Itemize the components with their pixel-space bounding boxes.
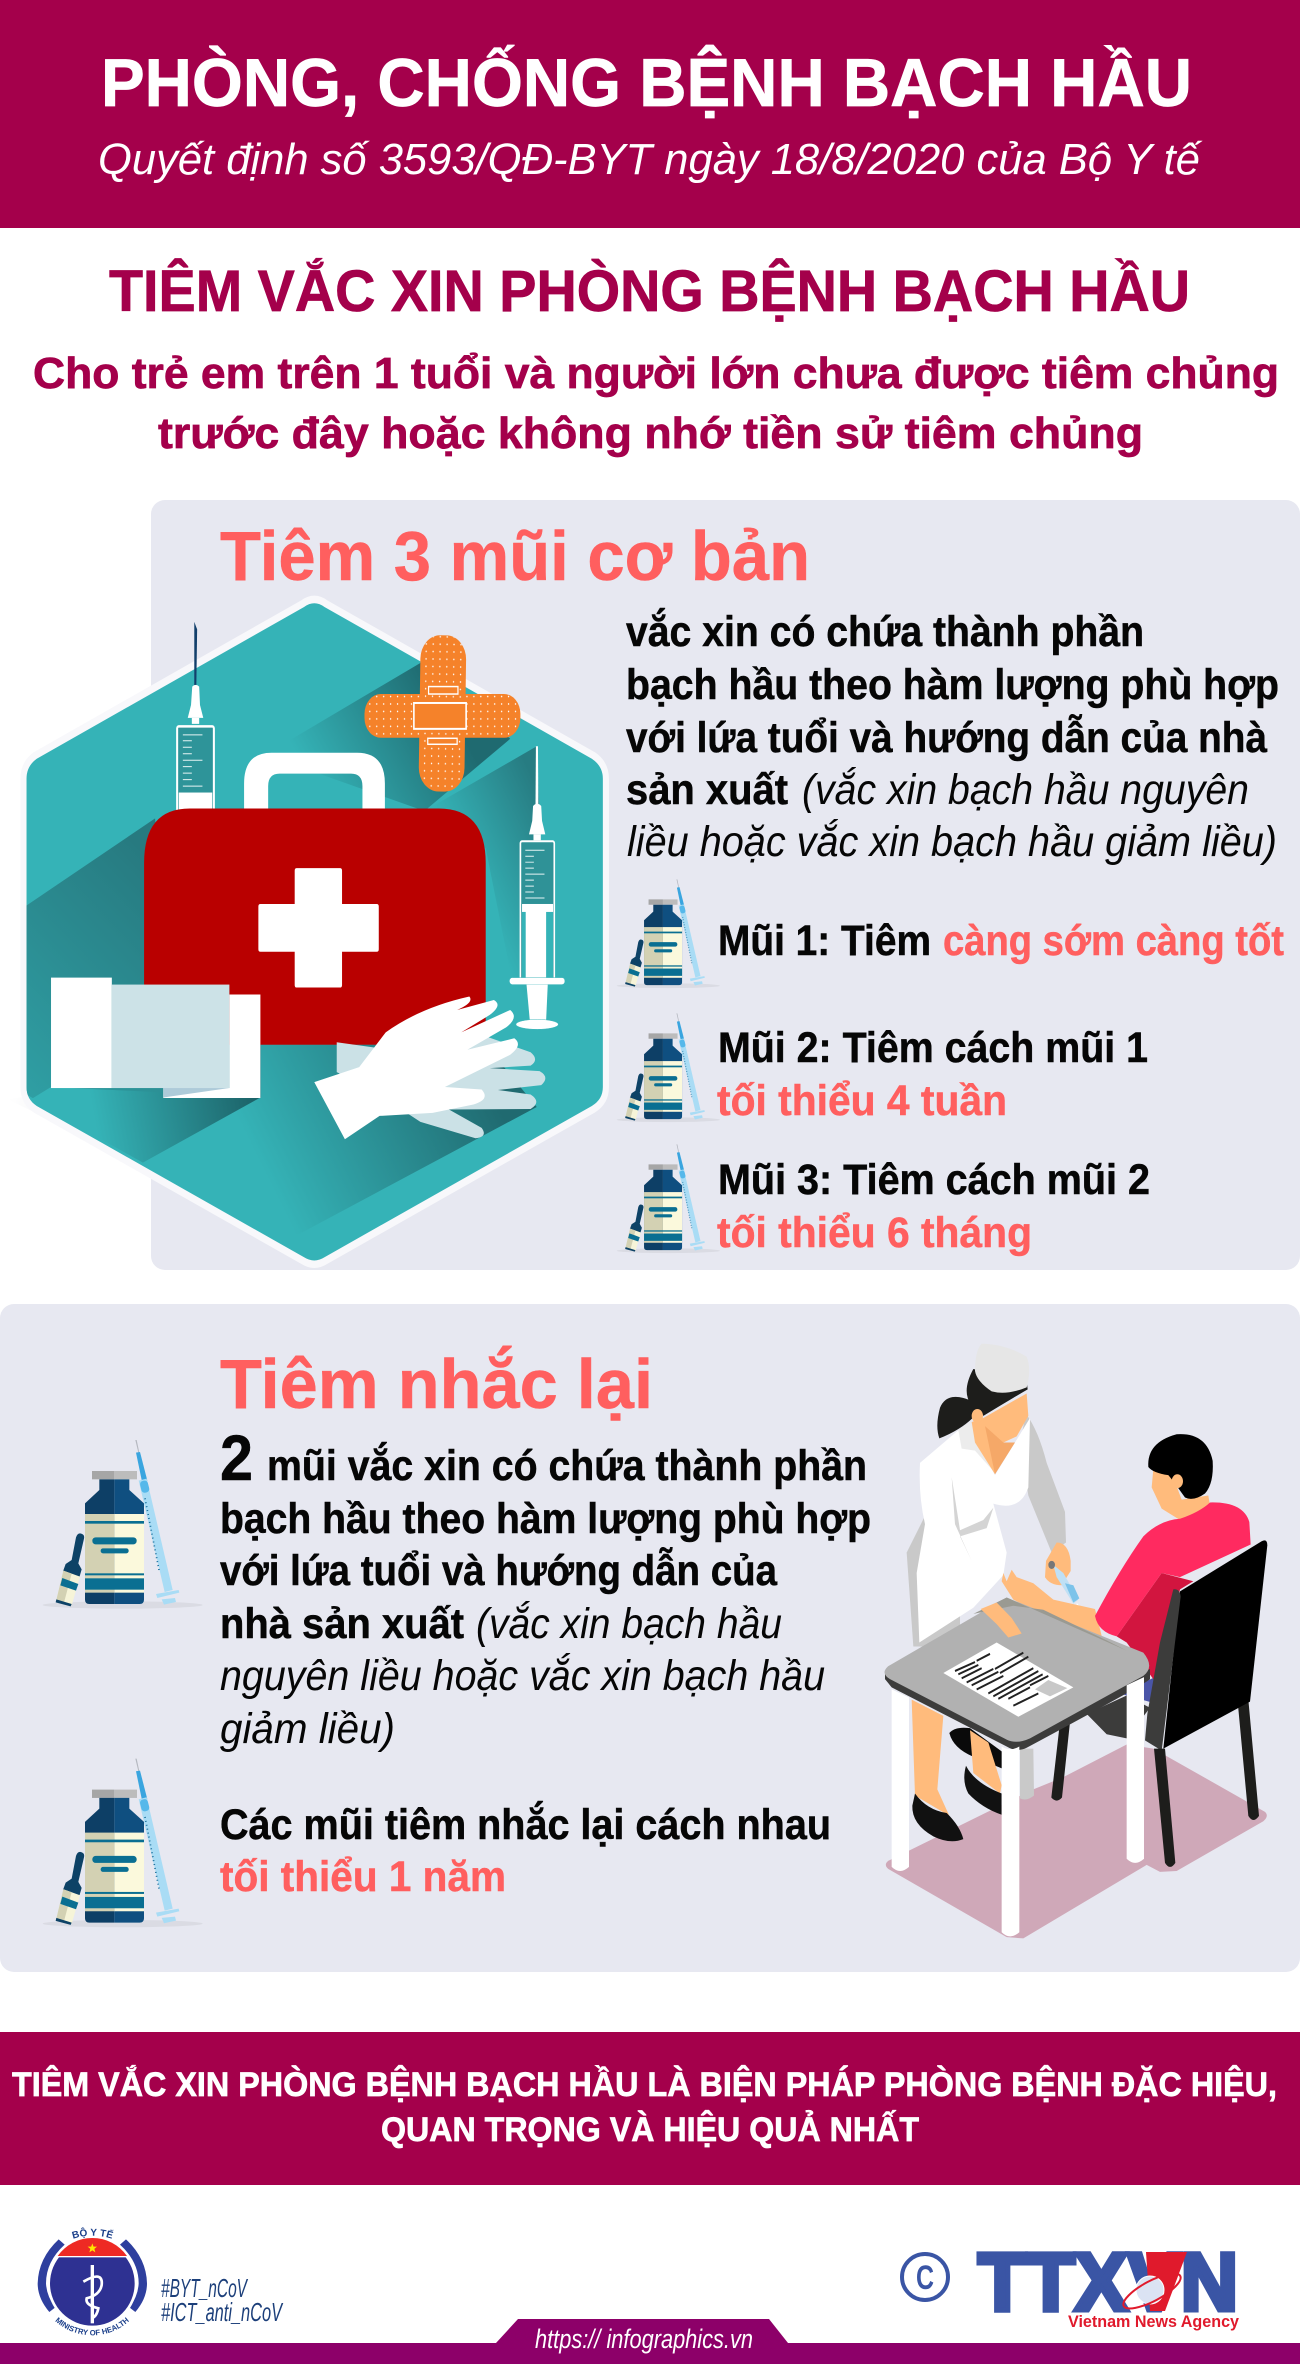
booster interval text: Các mũi tiêm nhắc lại cách nhau xyxy=(220,1800,831,1849)
hashtags: #ICT_anti_nCoV xyxy=(161,2297,284,2327)
booster description text: mũi vắc xin có chứa thành phần xyxy=(267,1441,867,1490)
table xyxy=(885,1598,1150,1936)
agency name: Vietnam News Agency xyxy=(1068,2312,1240,2331)
dose 3 text: Mũi 3: Tiêm cách mũi 2 xyxy=(718,1156,1150,1204)
dose 2 text: Mũi 2: Tiêm cách mũi 1 xyxy=(718,1024,1148,1072)
booster description text: giảm liều) xyxy=(220,1705,395,1753)
dose 1 xyxy=(617,879,1284,988)
dose 1 text: Mũi 1: Tiêm xyxy=(718,917,931,965)
booster description text: với lứa tuổi và hướng dẫn của xyxy=(220,1546,778,1595)
icon: vaccine bottle xyxy=(43,1759,203,1927)
booster interval text: tối thiểu 1 năm xyxy=(220,1853,506,1901)
target group text: Cho trẻ em trên 1 tuổi và người lớn chưa được tiêm chủng xyxy=(33,349,1279,398)
dose 2 xyxy=(617,1013,1148,1125)
icon: vaccine bottle xyxy=(617,879,720,988)
patient xyxy=(1002,1434,1251,1679)
dose 3 text xyxy=(717,1156,1150,1257)
wordmark: TTXVN xyxy=(978,2237,1238,2328)
title: PHÒNG, CHỐNG BỆNH BẠCH HẦU xyxy=(101,44,1192,121)
conclusion text: QUAN TRỌNG VÀ HIỆU QUẢ NHẤT xyxy=(381,2111,919,2149)
description text xyxy=(626,607,1279,866)
booster description text: (vắc xin bạch hầu xyxy=(476,1600,782,1648)
booster description text: nguyên liều hoặc vắc xin bạch hầu xyxy=(220,1652,825,1700)
subtitle: Quyết định số 3593/QĐ-BYT ngày 18/8/2020 của Bộ Y tế xyxy=(98,135,1202,184)
icon: vaccine bottle xyxy=(43,1440,203,1609)
dose 2 text xyxy=(717,1024,1148,1125)
illustration: nurse vaccinating patient xyxy=(885,1344,1267,1938)
panel: booster doses xyxy=(0,1304,1300,1972)
booster description text: bạch hầu theo hàm lượng phù hợp xyxy=(220,1495,871,1543)
icon: case handle xyxy=(244,753,385,813)
nurse xyxy=(907,1344,1086,1841)
icon: right syringe xyxy=(509,746,565,1029)
logo: Ministry of Health: MINISTRY OF HEALTH xyxy=(55,2317,129,2336)
chair back legs xyxy=(1051,1700,1259,1820)
hashtags xyxy=(161,2273,284,2327)
copyright mark: C xyxy=(916,2259,934,2297)
illustration: first aid kit hexagon xyxy=(8,603,603,1260)
document on table xyxy=(943,1642,1073,1717)
description text: sản xuất xyxy=(626,766,788,814)
icon: vaccine bottle xyxy=(617,1013,720,1122)
syringe xyxy=(1048,1561,1086,1615)
booster interval text xyxy=(220,1800,831,1901)
panel: 3 basic doses xyxy=(8,500,1300,1270)
dose 3 xyxy=(617,1144,1150,1257)
booster description text: nhà sản xuất xyxy=(220,1600,464,1648)
dose 3 text: tối thiểu 6 tháng xyxy=(717,1209,1032,1257)
header band xyxy=(0,0,1300,228)
icon: gauze papers xyxy=(51,978,260,1098)
logo: TTXVN xyxy=(902,2237,1240,2331)
patient shoe and pants xyxy=(949,1728,1003,1769)
hashtags: #BYT_nCoV xyxy=(161,2273,249,2303)
website url: https:// infographics.vn xyxy=(535,2324,753,2354)
target group text: trước đây hoặc không nhớ tiền sử tiêm chủng xyxy=(158,409,1143,458)
dose 1 text xyxy=(718,917,1284,965)
icon: gloves xyxy=(314,997,545,1139)
copyright mark xyxy=(902,2254,948,2300)
bottom banner xyxy=(0,2032,1300,2185)
logo: Ministry of Health xyxy=(38,2227,147,2336)
logo: Ministry of Health: BỘ Y TẾ xyxy=(72,2227,114,2239)
section heading: TIÊM VẮC XIN PHÒNG BỆNH BẠCH HẦU xyxy=(109,259,1190,324)
description text: (vắc xin bạch hầu nguyên xyxy=(802,766,1249,814)
booster description text xyxy=(220,1422,871,1753)
icon: left syringe xyxy=(177,622,214,811)
dose 2 text: tối thiểu 4 tuần xyxy=(717,1077,1007,1125)
chair xyxy=(1145,1540,1267,1867)
target group text xyxy=(33,349,1279,458)
description text: vắc xin có chứa thành phần xyxy=(626,607,1144,656)
booster description text: 2 xyxy=(220,1422,253,1494)
panel heading: Tiêm nhắc lại xyxy=(220,1345,653,1423)
conclusion text xyxy=(12,2066,1277,2149)
section heading xyxy=(33,259,1279,458)
icon: red first aid case xyxy=(144,808,486,1045)
globe emblem xyxy=(1119,2252,1187,2315)
nurse forearm on table xyxy=(981,1602,1022,1638)
footer bar xyxy=(0,2319,1300,2364)
icon: bandage xyxy=(364,635,520,792)
panel heading: Tiêm 3 mũi cơ bản xyxy=(220,517,810,595)
icon: vaccine bottle xyxy=(617,1144,720,1253)
